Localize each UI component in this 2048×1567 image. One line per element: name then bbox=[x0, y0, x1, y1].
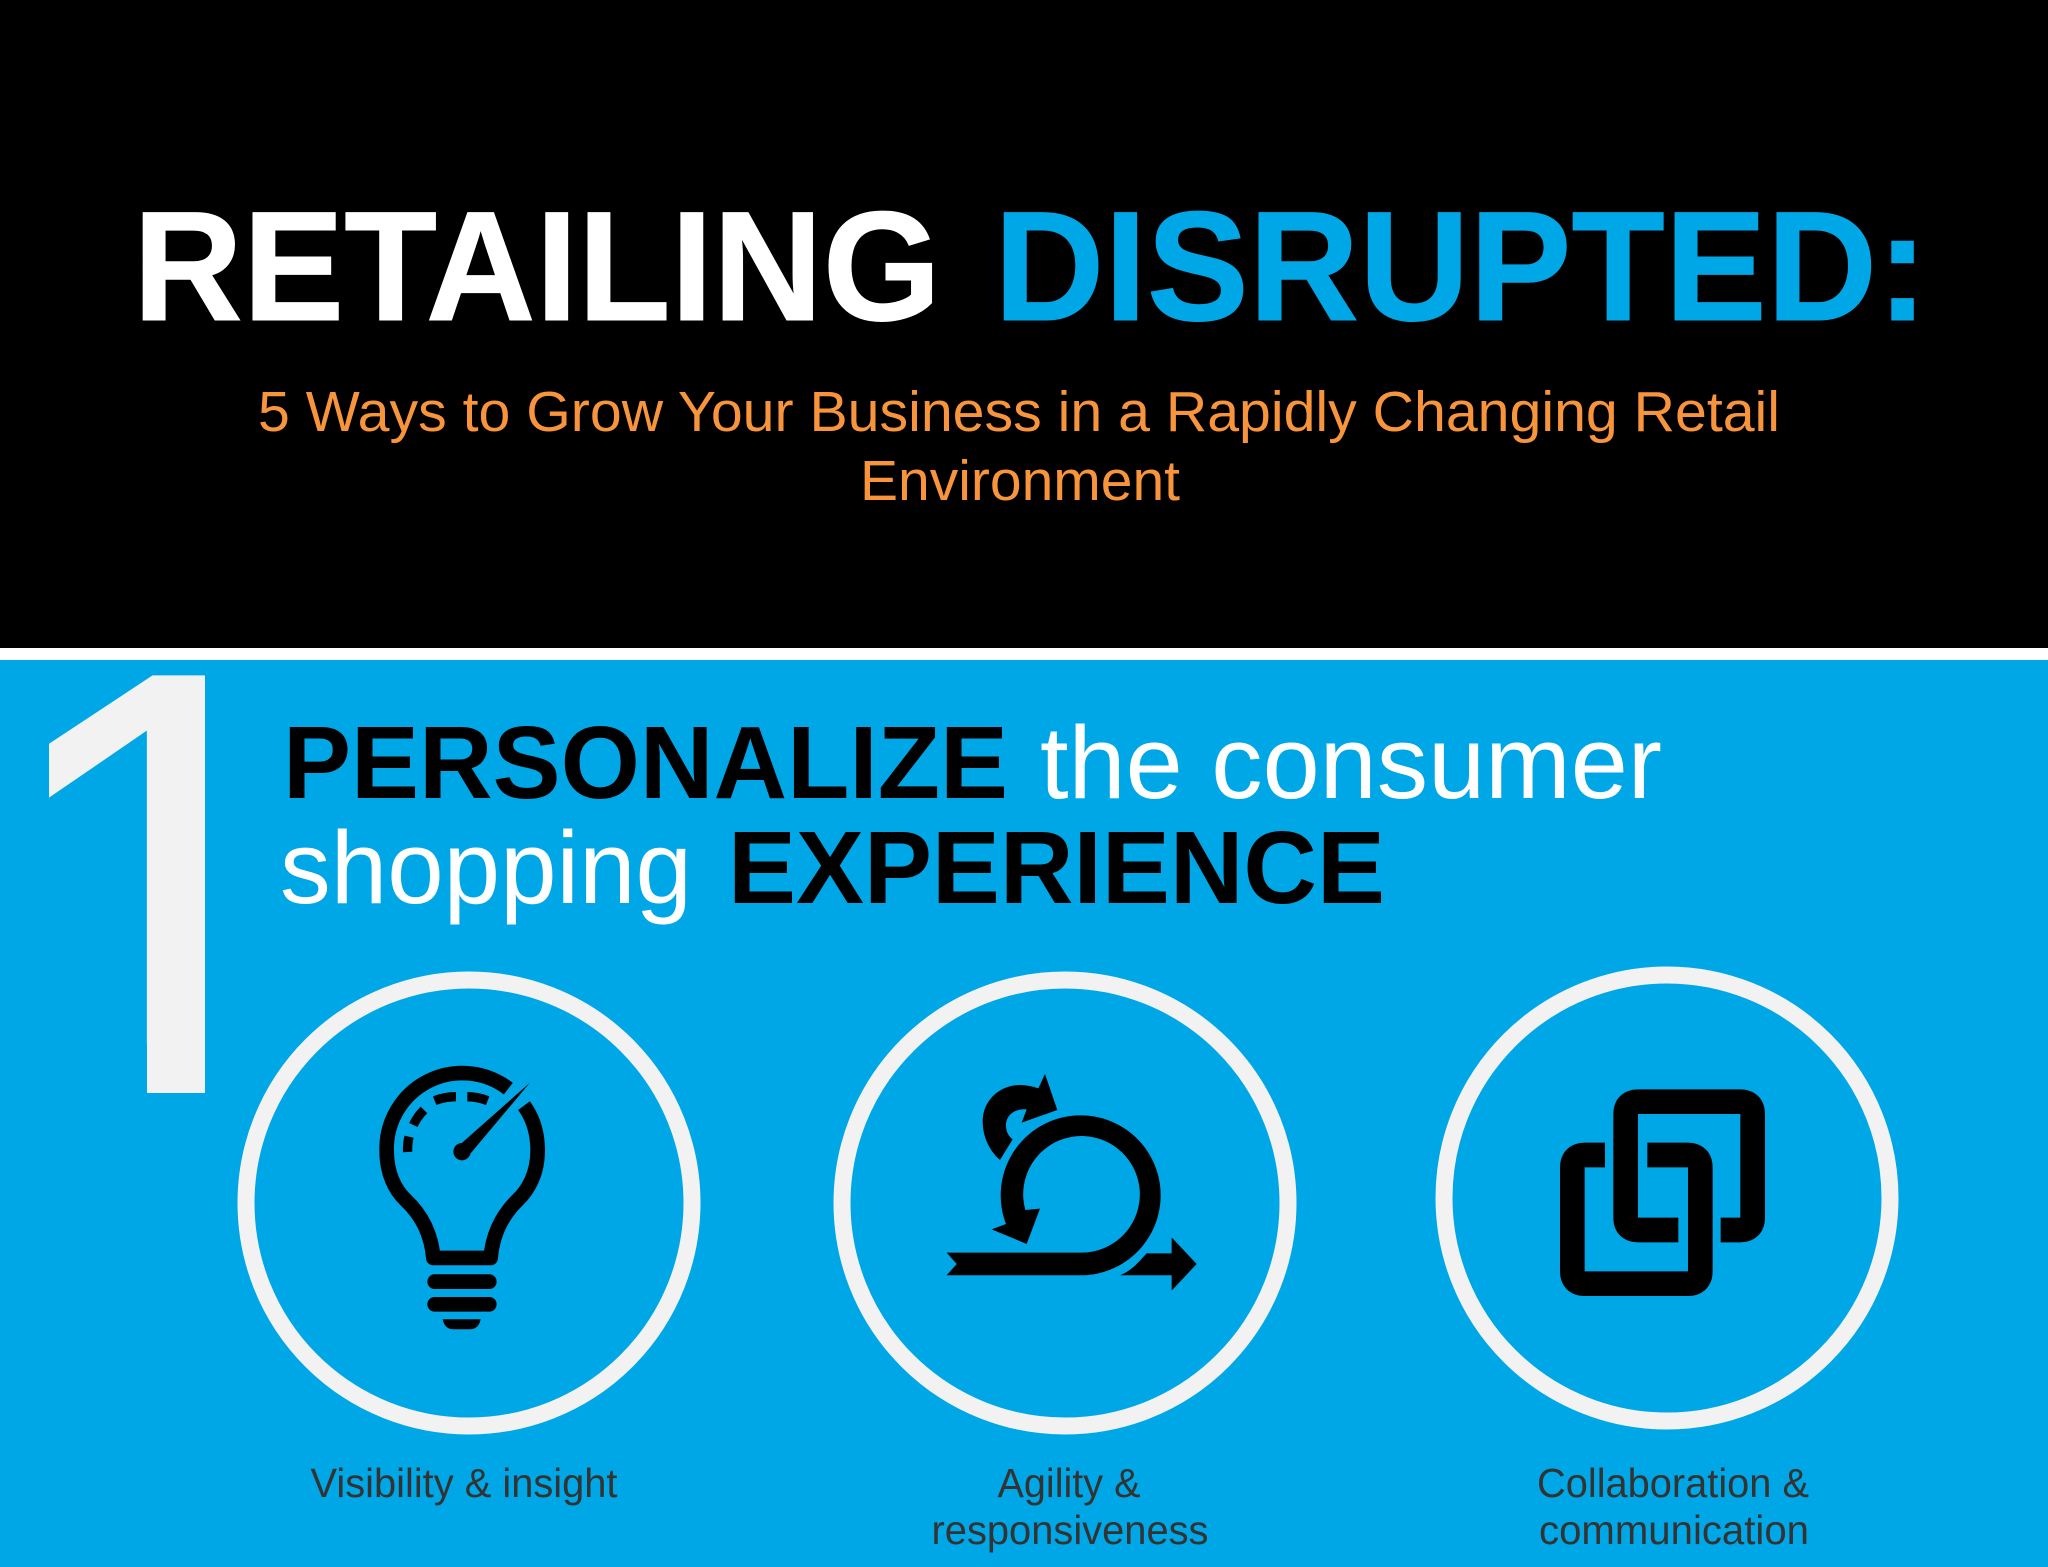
label: agility: Agility & bbox=[998, 1460, 1140, 1506]
panel: section 1 bbox=[0, 660, 2048, 1567]
subtitle bbox=[258, 380, 1780, 513]
circle: collaboration bbox=[1444, 975, 1890, 1421]
title: DISRUPTED: bbox=[994, 180, 1928, 354]
big numeral 1: 1 bbox=[0, 546, 340, 1221]
circle: visibility bbox=[246, 980, 692, 1426]
panel: header bbox=[0, 0, 2048, 648]
section heading: PERSONALIZE bbox=[283, 705, 1008, 820]
section heading: shopping bbox=[280, 810, 692, 925]
section heading: the consumer bbox=[1040, 705, 1662, 820]
title bbox=[133, 180, 1928, 354]
circle: agility bbox=[842, 980, 1288, 1426]
label: collaboration bbox=[1537, 1460, 1809, 1553]
section heading bbox=[280, 705, 1662, 925]
label: collaboration: communication bbox=[1539, 1507, 1809, 1553]
label: agility bbox=[932, 1460, 1208, 1553]
label: agility: responsiveness bbox=[932, 1507, 1208, 1553]
title: RETAILING bbox=[133, 180, 941, 354]
icon: linked squares bbox=[1572, 1102, 1753, 1284]
label: collaboration: Collaboration & bbox=[1537, 1460, 1809, 1506]
label: visibility: Visibility & insight bbox=[310, 1460, 618, 1506]
section heading: EXPERIENCE bbox=[728, 810, 1385, 925]
subtitle: Environment bbox=[860, 449, 1180, 513]
icon: light bulb gauge bbox=[387, 1073, 538, 1329]
icon: agile loop arrow bbox=[947, 1074, 1197, 1291]
subtitle: 5 Ways to Grow Your Business in a Rapidly Changing Retail bbox=[258, 380, 1780, 444]
